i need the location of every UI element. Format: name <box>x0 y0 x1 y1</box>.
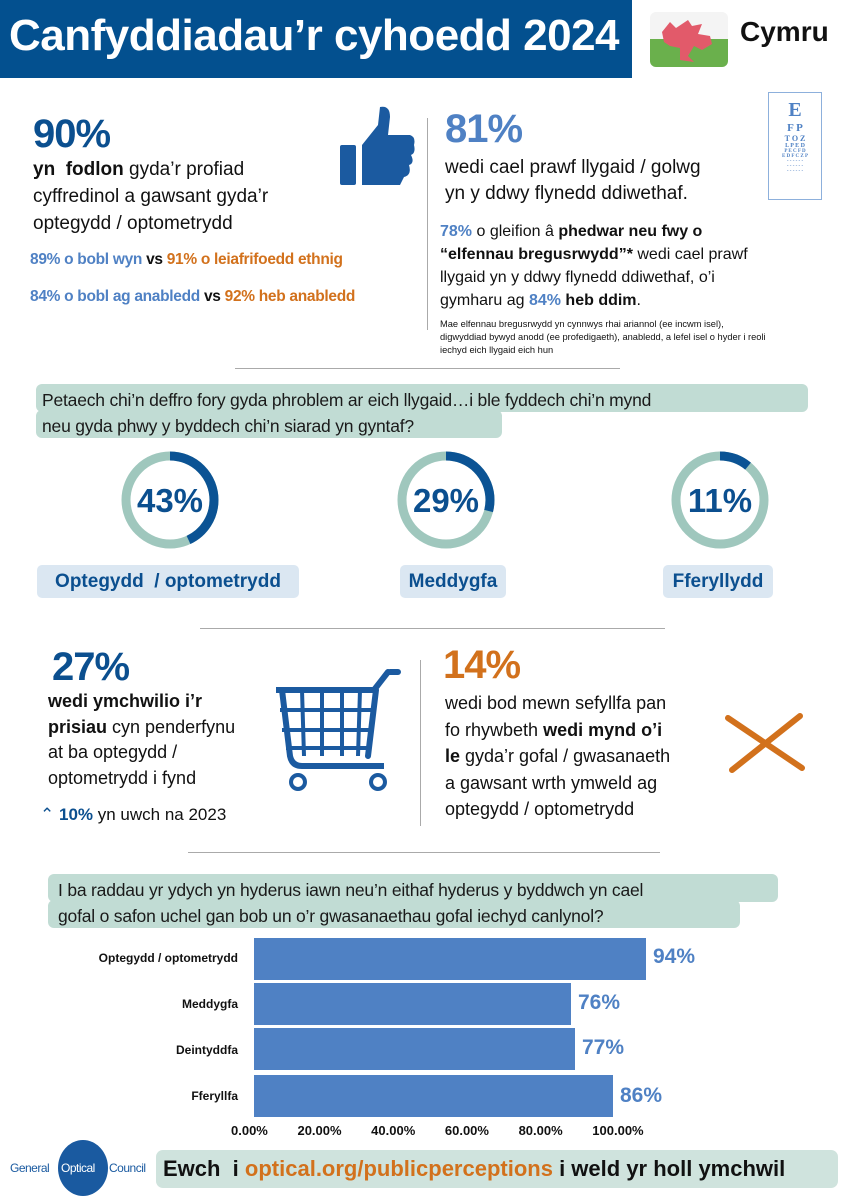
question box 1 <box>36 384 808 438</box>
divider <box>235 368 620 369</box>
label: pharmacist <box>663 565 773 598</box>
footnote <box>440 319 766 355</box>
text: fo rhywbeth wedi mynd o’i <box>445 720 662 740</box>
icon: welsh flag <box>650 12 728 67</box>
text: wedi cael prawf llygaid / golwg <box>445 157 701 178</box>
divider <box>188 852 660 853</box>
icon: thumbs up <box>340 106 415 185</box>
chart: donut 43: 43% <box>137 482 203 519</box>
chart: donut 29 <box>398 452 494 548</box>
icon: eye chart: - - - - - - <box>787 164 803 169</box>
stat 81: 81% <box>445 107 522 151</box>
title: Canfyddiadau’r cyhoedd 2024 <box>9 11 619 60</box>
label: pharmacist: Fferyllydd <box>673 571 763 592</box>
icon: eye chart: - - - - - - <box>787 159 803 164</box>
icon: eye chart: E D F C Z P <box>782 154 808 159</box>
vulnerability text: llygaid yn y ddwy flynedd ddiwethaf, o’i <box>440 269 715 286</box>
label: GP <box>400 565 506 598</box>
text: optegydd / optometrydd <box>33 213 233 234</box>
header bar <box>0 0 632 78</box>
text <box>48 691 235 788</box>
divider vertical <box>420 660 421 826</box>
text <box>445 157 701 204</box>
text: a gawsant wrth ymweld ag <box>445 772 657 792</box>
chart: donut 29: 29% <box>413 482 479 519</box>
icon: eye chart <box>768 92 822 200</box>
panel: 90% satisfied <box>30 112 355 305</box>
text <box>445 693 670 819</box>
logo: General Optical Council: Optical <box>61 1161 95 1175</box>
label: optometrist <box>37 565 299 598</box>
bar chart: confidence: 94% <box>653 945 695 968</box>
icon: shopping cart <box>276 669 401 791</box>
footer call to action <box>156 1150 838 1188</box>
vulnerability text: “elfennau bregusrwydd”* wedi cael prawf <box>440 246 748 263</box>
divider vertical <box>427 118 428 330</box>
text: cyffredinol a gawsant gyda’r <box>33 186 268 207</box>
text: le gyda’r gofal / gwasanaeth <box>445 746 670 766</box>
icon: eye chart: F P <box>787 122 803 134</box>
text: optometrydd i fynd <box>48 768 196 788</box>
text: wedi bod mewn sefyllfa pan <box>445 693 666 713</box>
bar chart: confidence: Fferyllfa <box>191 1089 238 1103</box>
region label: Cymru <box>740 16 829 47</box>
question box 2 <box>48 874 778 928</box>
text: at ba optegydd / <box>48 742 177 762</box>
question box 1: Petaech chi’n deffro fory gyda phroblem ar eich llygaid…i ble fyddech chi’n mynd <box>42 390 651 410</box>
footnote: iechyd eich llygaid eich hun <box>440 345 553 355</box>
bar chart: confidence: 76% <box>578 991 620 1014</box>
panel: 90% satisfied: 84% o bobl ag anabledd vs 92% heb anabledd <box>30 288 355 305</box>
vulnerability text: 78% o gleifion â phedwar neu fwy o <box>440 223 702 240</box>
footnote: Mae elfennau bregusrwydd yn cynnwys rhai ariannol (ee incwm isel), <box>440 319 724 329</box>
icon: eye chart: P E C F D <box>784 149 806 154</box>
panel: 27% price research <box>40 645 235 824</box>
text: prisiau cyn penderfynu <box>48 716 235 736</box>
text: yn fodlon gyda’r profiad <box>33 159 244 180</box>
question box 2: gofal o safon uchel gan bob un o’r gwasanaethau gofal iechyd canlynol? <box>58 906 603 926</box>
breakdown: 89% o bobl wyn vs 91% o leiafrifoedd ethnig <box>30 251 343 268</box>
text: yn y ddwy flynedd ddiwethaf. <box>445 183 688 204</box>
icon: eye chart: - - - - - - <box>787 169 803 174</box>
bar chart: confidence: 77% <box>582 1036 624 1059</box>
bar chart: confidence: Meddygfa <box>182 997 238 1011</box>
bar chart: confidence: Optegydd / optometrydd <box>99 951 238 965</box>
bar chart: confidence: 86% <box>620 1084 662 1107</box>
logo: General Optical Council <box>10 1140 146 1196</box>
label: optometrist: Optegydd / optometrydd <box>55 571 281 592</box>
icon: eye chart: T O Z <box>785 134 805 143</box>
vulnerability text: gymharu ag 84% heb ddim. <box>440 292 641 309</box>
footer call to action: Ewch i optical.org/publicperceptions i weld yr holl ymchwil <box>163 1156 785 1181</box>
stat 90: 90% <box>33 112 110 156</box>
bar chart: confidence: 0.00% 20.00% 40.00% 60.00% 80.00% 100.00% <box>231 1123 644 1138</box>
text: wedi ymchwilio i’r <box>48 691 202 711</box>
chart: donut 43 <box>122 452 218 548</box>
panel: 81% eye test <box>440 107 766 355</box>
question box 1: neu gyda phwy y byddech chi’n siarad yn gyntaf? <box>42 416 414 436</box>
bar chart: confidence <box>99 938 695 1138</box>
vulnerability text <box>440 223 748 309</box>
question box 2: I ba raddau yr ydych yn hyderus iawn neu’n eithaf hyderus y byddwch yn cael <box>58 880 643 900</box>
chart: donut 11 <box>672 452 768 548</box>
chart: donut 11: 11% <box>688 482 752 519</box>
stat 27: 27% <box>52 645 129 689</box>
footnote: digwyddiad bywyd anodd (ee profedigaeth), anabledd, a lefel isel o hyder i reoli <box>440 332 766 342</box>
divider <box>200 628 665 629</box>
icon: cross <box>725 713 805 773</box>
icon: eye chart: E <box>788 99 802 121</box>
logo: General Optical Council: General <box>10 1161 49 1175</box>
icon: eye chart: L P E D <box>785 143 805 149</box>
bar chart: confidence: Deintyddfa <box>176 1043 238 1057</box>
text: optegydd / optometrydd <box>445 799 634 819</box>
text <box>33 159 268 234</box>
trend: ⌃ 10% yn uwch na 2023 <box>40 805 226 824</box>
panel: 14% something went wrong <box>443 643 670 819</box>
stat 14: 14% <box>443 643 520 687</box>
logo: General Optical Council: Council <box>109 1161 146 1175</box>
label: GP: Meddygfa <box>409 571 497 592</box>
